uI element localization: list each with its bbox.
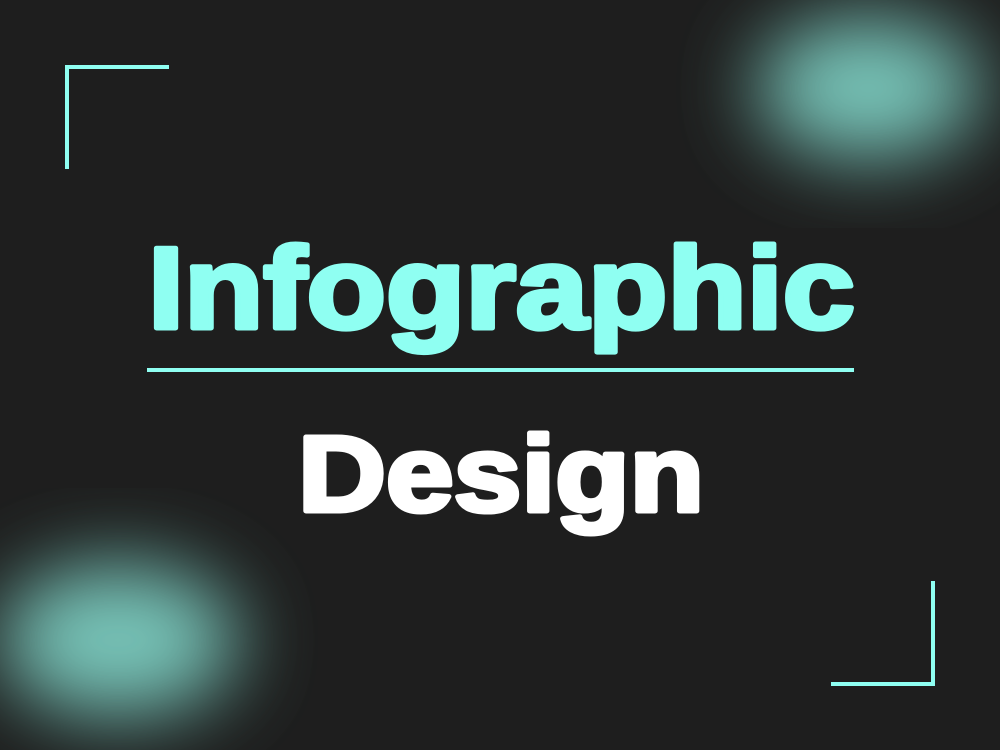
subtitle: Design: Design (298, 413, 704, 534)
glow: bottom left (0, 564, 238, 716)
title: Infographic: Infographic (148, 223, 855, 353)
corner bracket: bottom right (831, 581, 935, 686)
corner bracket: top left (65, 65, 169, 169)
divider line (147, 368, 854, 372)
glow: top right (756, 18, 980, 158)
